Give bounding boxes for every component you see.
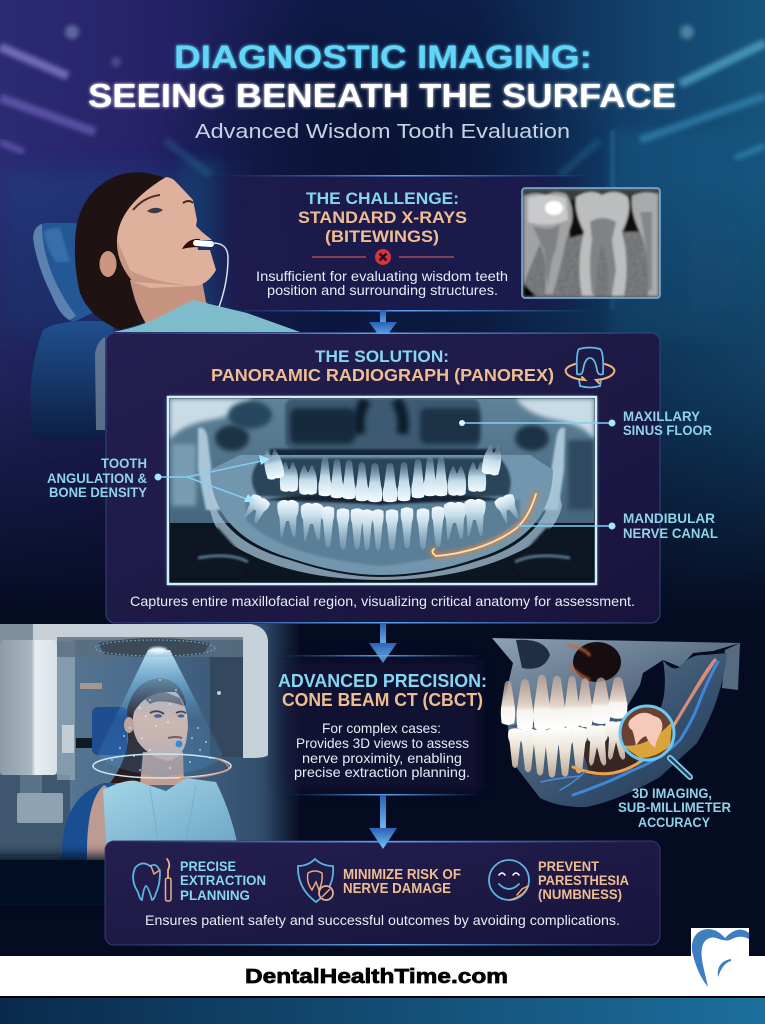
arrow: challenge to solution	[369, 310, 397, 341]
lower teeth model	[508, 721, 627, 778]
cbct description: precise extraction planning.	[294, 764, 470, 780]
cbct description: Provides 3D views to assess	[296, 735, 469, 751]
hair back	[110, 678, 186, 783]
website name: DentalHealthTime.com	[245, 966, 508, 988]
prevent paresthesia numbness: (NUMBNESS)	[538, 886, 622, 902]
3d jaw model with magnifier	[492, 638, 740, 807]
label: maxillary sinus floor	[623, 408, 712, 438]
cbct heading: ADVANCED PRECISION:	[278, 671, 487, 691]
label: tooth angulation and bone density	[47, 455, 148, 500]
mandible	[170, 455, 594, 582]
scene fade at bottom	[0, 856, 310, 906]
panel: outcomes	[105, 841, 660, 946]
nerves	[541, 660, 718, 795]
translucent mandible	[508, 653, 727, 807]
prevent paresthesia numbness	[538, 858, 629, 902]
label: tooth angulation and bone density: ANGULATION &	[47, 470, 147, 486]
glowing mandibular nerve canal	[432, 494, 536, 556]
icon: tooth with dental tool	[133, 859, 171, 901]
sensor and wire	[196, 243, 211, 244]
bib	[113, 300, 300, 332]
shoulder	[87, 785, 118, 860]
lower teeth	[241, 492, 522, 550]
label: maxillary sinus floor: MAXILLARY	[623, 408, 701, 424]
challenge description: position and surrounding structures.	[267, 282, 498, 298]
icon: rotating tooth scan	[566, 348, 614, 388]
label: 3d imaging accuracy	[618, 785, 731, 830]
solution heading	[211, 347, 554, 385]
cbct heading: CONE BEAM CT (CBCT)	[282, 690, 483, 710]
icon: red x	[312, 249, 454, 265]
icon: shield with tooth	[298, 859, 333, 902]
mouth sensor	[176, 740, 182, 748]
cbct description: For complex cases:	[322, 720, 441, 736]
label: maxillary sinus floor: SINUS FLOOR	[623, 422, 712, 438]
label: tooth angulation and bone density: TOOTH	[101, 455, 147, 471]
logo: blue tooth	[691, 928, 749, 987]
label: 3d imaging accuracy: ACCURACY	[638, 814, 711, 830]
precise extraction planning: EXTRACTION	[180, 872, 266, 888]
challenge description: Insufficient for evaluating wisdom teeth	[256, 268, 508, 284]
panoramic caption: Captures entire maxillofacial region, visualizing critical anatomy for assessment.	[130, 593, 635, 609]
panoramic x-ray image	[154, 397, 616, 584]
arrow: cbct to outcomes	[369, 795, 397, 849]
scanner arch	[73, 624, 268, 758]
callout arrows: tooth angulation	[154, 455, 270, 502]
bib	[103, 778, 237, 842]
minimize risk of nerve damage: NERVE DAMAGE	[343, 881, 451, 897]
title: SEEING BENEATH THE SURFACE	[88, 77, 676, 114]
chair lower	[62, 783, 115, 860]
challenge heading: (BITEWINGS)	[325, 227, 439, 246]
label: 3d imaging accuracy: 3D IMAGING,	[632, 785, 712, 801]
minimize risk of nerve damage	[343, 867, 461, 897]
arrow: solution to cbct	[369, 623, 397, 663]
panel: the challenge	[202, 175, 660, 312]
challenge description	[256, 268, 508, 298]
upper teeth model	[501, 675, 627, 731]
precise extraction planning: PRECISE	[180, 858, 236, 874]
title	[88, 39, 676, 114]
patient in dental chair with bitewing sensor	[31, 172, 300, 440]
upper teeth	[261, 444, 504, 502]
cone of x-ray beam	[93, 640, 231, 778]
label: tooth angulation and bone density: BONE DENSITY	[49, 484, 148, 500]
magnifying glass over wisdom tooth	[620, 706, 690, 777]
neck	[140, 752, 184, 785]
chair body	[31, 321, 114, 440]
outcomes caption: Ensures patient safety and successful outcomes by avoiding complications.	[145, 912, 620, 928]
label: mandibular nerve canal	[623, 510, 718, 541]
callout line: maxillary sinus	[459, 420, 616, 426]
callout line: mandibular nerve	[517, 522, 616, 530]
prevent paresthesia numbness: PARESTHESIA	[538, 872, 629, 888]
chair headrest	[33, 223, 94, 322]
face	[133, 692, 188, 761]
precise extraction planning	[180, 858, 266, 903]
hair	[75, 172, 178, 330]
label: mandibular nerve canal: NERVE CANAL	[623, 525, 718, 541]
skull and sinus haze	[170, 399, 594, 523]
solution heading: THE SOLUTION:	[315, 347, 449, 366]
cbct scanner with patient	[0, 624, 310, 906]
cbct description: nerve proximity, enabling	[302, 750, 462, 766]
label: mandibular nerve canal: MANDIBULAR	[623, 510, 715, 526]
precise extraction planning: PLANNING	[180, 887, 250, 903]
cbct heading	[278, 671, 487, 710]
minimize risk of nerve damage: MINIMIZE RISK OF	[343, 867, 461, 883]
title: DIAGNOSTIC IMAGING:	[174, 39, 592, 75]
panel: the solution	[106, 332, 660, 624]
challenge heading: THE CHALLENGE:	[306, 189, 459, 208]
face	[117, 177, 216, 288]
challenge heading	[298, 189, 467, 246]
footer band	[0, 956, 765, 1024]
neck	[130, 280, 222, 330]
section: advanced precision cbct	[278, 655, 487, 796]
prevent paresthesia numbness: PREVENT	[538, 858, 599, 874]
bitewing x-ray image	[522, 188, 660, 298]
solution heading: PANORAMIC RADIOGRAPH (PANOREX)	[211, 365, 554, 385]
scanner room	[0, 624, 300, 860]
icon: smiling face	[489, 860, 529, 900]
subtitle: Advanced Wisdom Tooth Evaluation	[195, 121, 570, 143]
translucent skull	[492, 638, 740, 727]
cbct description	[294, 720, 470, 780]
label: 3d imaging accuracy: SUB-MILLIMETER	[618, 799, 731, 815]
challenge heading: STANDARD X-RAYS	[298, 208, 467, 227]
